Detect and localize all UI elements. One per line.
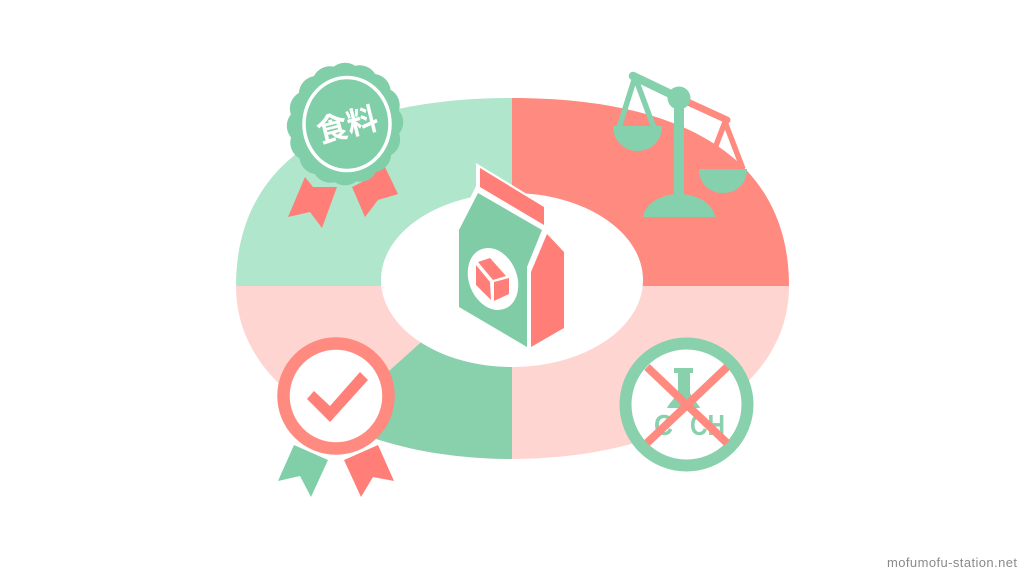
prohibition ring (626, 344, 748, 466)
scale right pan (699, 169, 747, 193)
award check mark (307, 372, 368, 422)
central quadrant ring (230, 90, 794, 466)
bag side panel (531, 234, 564, 347)
center white ellipse (381, 193, 643, 367)
quadrant: bottom left green wedge (376, 342, 512, 459)
scale pillar (674, 98, 684, 202)
award ribbon left (278, 445, 328, 497)
icon: balance scale (613, 76, 747, 217)
scale left strings (619, 77, 654, 128)
scale beam left (633, 76, 679, 98)
chemical text C: C (654, 410, 673, 442)
cube icon (476, 258, 509, 301)
rosette ribbon right (352, 163, 398, 217)
rosette text: 食料 (313, 101, 382, 150)
infographic canvas (236, 62, 1017, 567)
icon: food certification rosette (278, 54, 412, 228)
scale left pan (613, 126, 662, 151)
award ring (284, 344, 388, 448)
icon: check mark award (278, 344, 394, 497)
scale beam right (679, 98, 727, 120)
quadrant: top left (230, 90, 512, 286)
icon: no chemicals sign (626, 344, 748, 466)
scale base (643, 194, 715, 217)
flask (667, 368, 700, 408)
chemical text CH: CH (690, 410, 725, 442)
quadrant: bottom right (512, 286, 794, 466)
rosette inner ring (304, 78, 390, 170)
award ribbon right (344, 445, 394, 497)
quadrant: bottom left (230, 286, 512, 466)
bag top flap (480, 168, 544, 225)
red cross (647, 367, 727, 443)
icon: feed bag (455, 163, 568, 351)
scale pivot (668, 86, 690, 110)
bag front panel (459, 193, 542, 347)
bag white outline (455, 163, 568, 351)
scale right strings (707, 122, 743, 169)
watermark: mofumofu-station.net (887, 555, 1017, 570)
bag label circle (459, 240, 527, 318)
quadrant: top right (512, 90, 794, 286)
rosette scalloped seal (278, 54, 412, 194)
rosette ribbon left (288, 177, 337, 228)
